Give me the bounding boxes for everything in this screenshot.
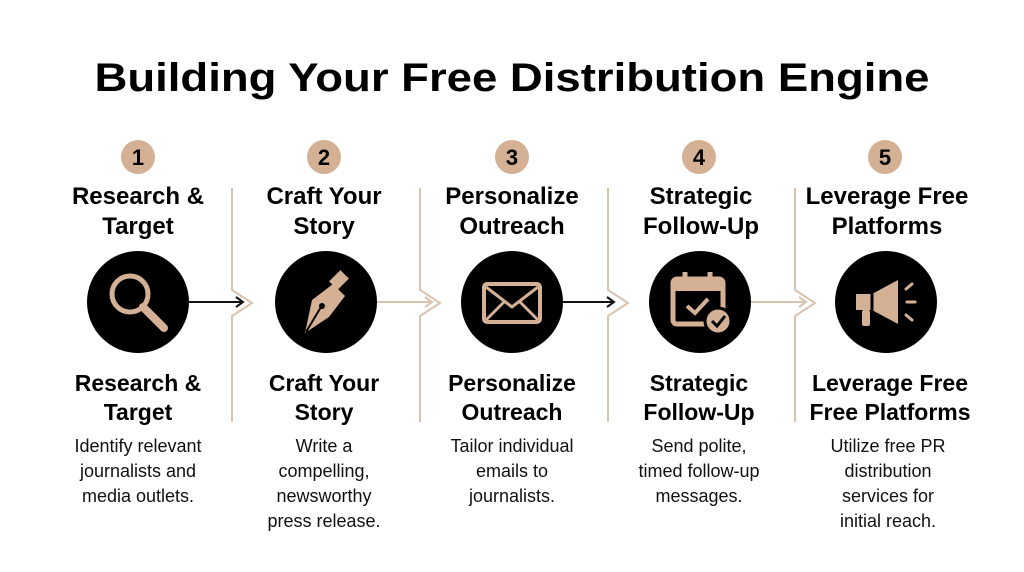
description 2: press release. [267, 511, 381, 531]
number badge 1 [121, 140, 155, 174]
description 1: Identify relevant [74, 436, 202, 456]
heading 3: Personalize [445, 183, 579, 210]
heading 1: Research & [72, 183, 204, 210]
number badge 5 [868, 140, 902, 174]
step 1 [72, 140, 204, 506]
heading 5: Leverage Free [806, 183, 968, 210]
number badge 3 [495, 140, 529, 174]
heading 5: Platforms [832, 213, 942, 240]
number badge 4 [682, 140, 716, 174]
description 5: services for [842, 486, 934, 506]
icon: envelope [461, 251, 563, 353]
description 3: journalists. [468, 486, 555, 506]
step 4 [638, 140, 760, 506]
arrows between steps [188, 297, 806, 307]
number badge 3: 3 [506, 145, 518, 170]
subheading 5: Leverage Free [812, 370, 968, 396]
heading 2: Craft Your [266, 183, 382, 210]
icon: calendar check [649, 251, 751, 353]
icon: fountain pen [275, 251, 377, 353]
subheading 1: Research & [75, 370, 201, 396]
subheading 3: Personalize [448, 370, 576, 396]
description 3: Tailor individual [450, 436, 574, 456]
icon: megaphone [835, 251, 937, 353]
step 2 [266, 140, 382, 531]
heading 3: Outreach [459, 213, 565, 240]
heading 2: Story [293, 213, 355, 240]
icon: magnifier [87, 251, 189, 353]
step 3 [445, 140, 579, 506]
description 3: emails to [476, 461, 548, 481]
description 2: compelling, [278, 461, 370, 481]
number badge 1: 1 [132, 145, 144, 170]
description 1: journalists and [79, 461, 196, 481]
subheading 1: Target [104, 399, 173, 425]
description 4: timed follow-up [638, 461, 760, 481]
subheading 4: Strategic [650, 370, 748, 396]
subheading 2: Story [295, 399, 354, 425]
subheading 4: Follow-Up [643, 399, 755, 425]
dividers with chevrons [232, 188, 815, 422]
subheading 3: Outreach [462, 399, 562, 425]
description 4: messages. [655, 486, 743, 506]
number badge 5: 5 [879, 145, 891, 170]
subheading 5: Free Platforms [809, 399, 971, 425]
number badge 4: 4 [693, 145, 706, 170]
description 5: distribution [844, 461, 932, 481]
number badge 2 [307, 140, 341, 174]
heading 4: Follow-Up [643, 213, 759, 240]
number badge 2: 2 [318, 145, 330, 170]
heading 4: Strategic [650, 183, 752, 210]
description 4: Send polite, [651, 436, 747, 456]
description 5: Utilize free PR [830, 436, 946, 456]
heading 1: Target [102, 213, 174, 240]
step 5 [806, 140, 971, 531]
title: Building Your Free Distribution Engine [94, 56, 930, 100]
description 5: initial reach. [840, 511, 936, 531]
description 2: Write a [296, 436, 353, 456]
subheading 2: Craft Your [269, 370, 379, 396]
description 2: newsworthy [276, 486, 372, 506]
description 1: media outlets. [82, 486, 194, 506]
